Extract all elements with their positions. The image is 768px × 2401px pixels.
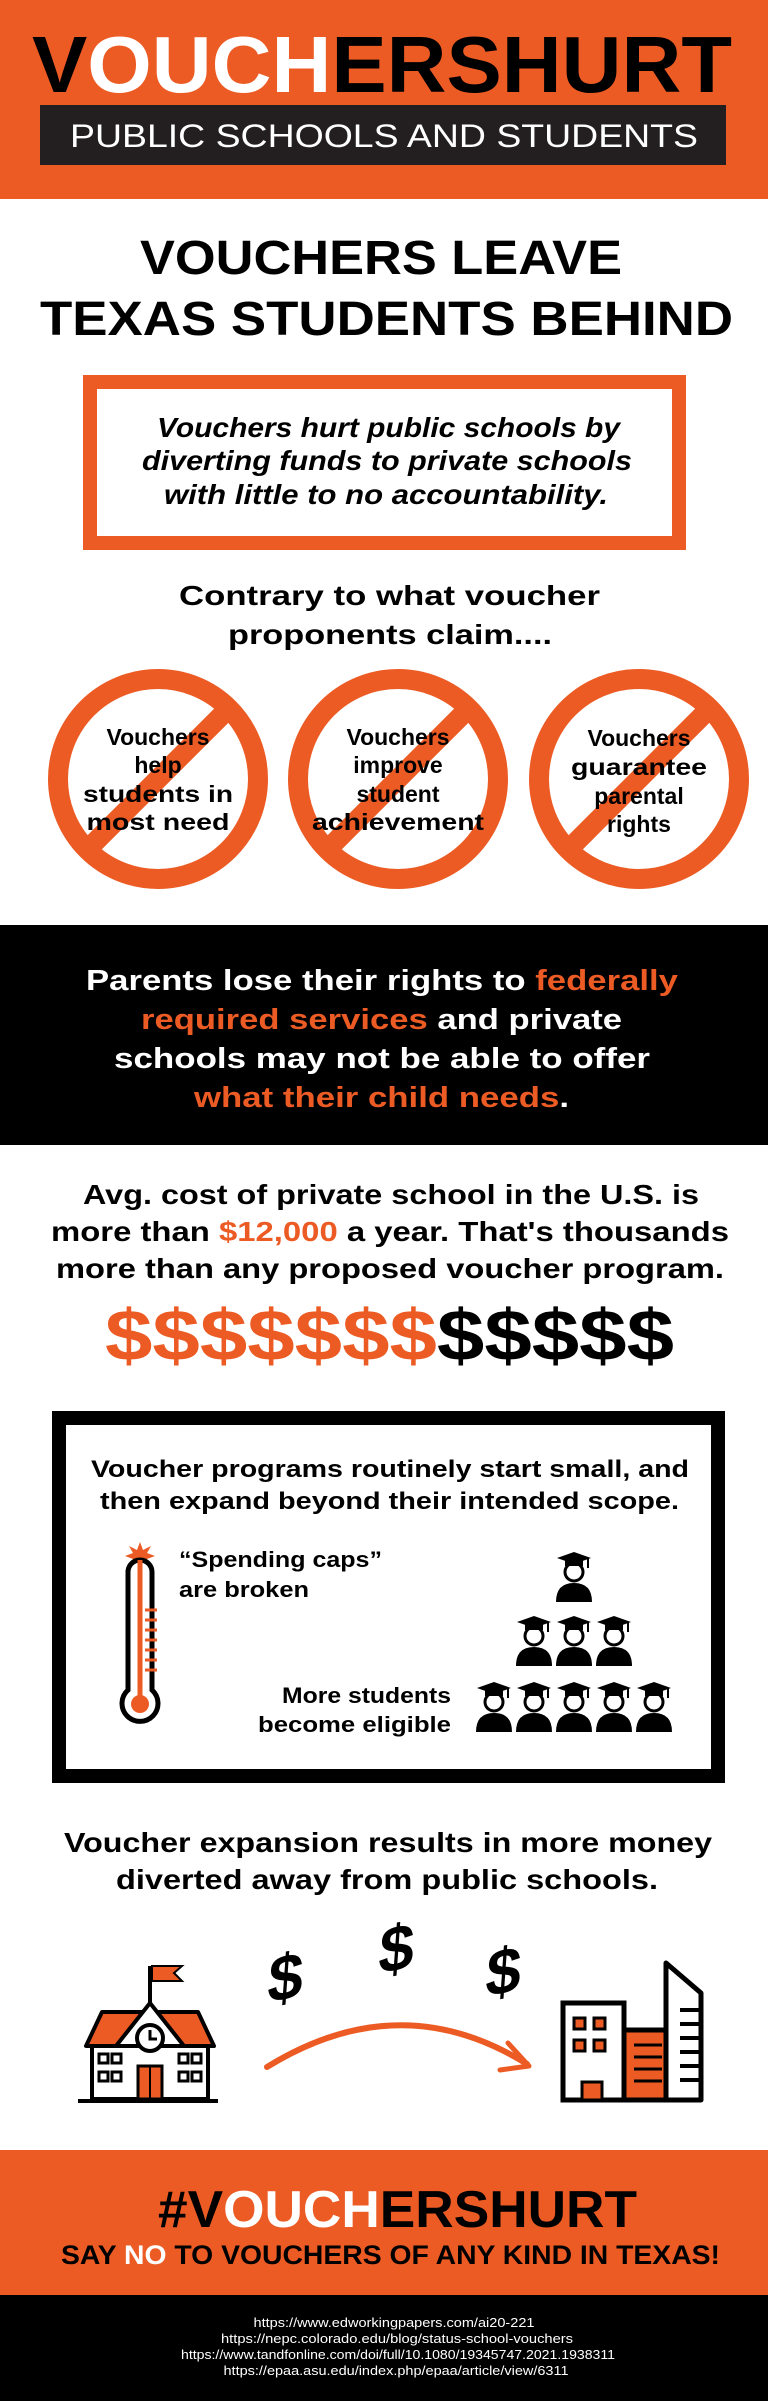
text: more students eligible: More students [282,1683,451,1708]
text: expansion diverts money: Voucher expansion results in more money [64,1827,712,1858]
icon: student pyramid [476,1552,672,1732]
icon: no-sign parental rights: Vouchers [587,725,691,751]
icon: no-sign improve achievement: student [356,781,440,807]
heading: contrary to claims [179,580,600,650]
footer: sources: https://www.tandfonline.com/doi/full/10.1080/19345747.2021.1938311 [181,2347,615,2362]
icon: no-sign improve achievement [298,679,498,879]
icon: public school [78,1966,218,2101]
icon: no-sign improve achievement: improve [353,752,443,778]
text: expansion diverts money [64,1827,712,1895]
icon: flying dollar signs: $ [265,1937,306,2017]
text: more students eligible [258,1683,451,1737]
panel heading: then expand beyond their intended scope. [100,1488,679,1515]
icon: thermometer [122,1542,158,1721]
title [40,232,733,346]
heading: contrary to claims: proponents claim.... [228,619,552,650]
footer: sources: https://www.edworkingpapers.com/ai20-221 [254,2315,534,2330]
icon: no-sign improve achievement: achievement [312,809,484,835]
icon: flying dollar signs: $ [483,1931,524,2011]
icon: no-sign parental rights: parental [594,783,684,809]
panel: parents lose rights: schools may not be able to offer [114,1043,650,1075]
footer banner: call to action [0,2150,768,2296]
callout: vouchers hurt public schools: Vouchers hurt public schools by [157,412,622,443]
dollar signs graphic: $$$$$$$ $$$$$ [105,1296,674,1376]
icon: no-sign improve achievement: Vouchers [346,724,450,750]
title: TEXAS STUDENTS BEHIND [40,293,733,346]
icon: no-sign helps students in most need: most need [86,809,230,835]
footer banner: call to action: SAY NO TO VOUCHERS OF ANY KIND IN TEXAS! [61,2240,720,2270]
icon: private school buildings [563,1963,701,2100]
text: average cost of private school: more than any proposed voucher program. [56,1253,724,1284]
callout: vouchers hurt public schools [90,382,679,543]
subtitle bar [40,105,726,165]
arrow: money flow [267,2025,529,2070]
panel: parents lose rights: what their child needs . [193,1082,569,1114]
callout: vouchers hurt public schools: with little to no accountability. [164,479,608,510]
footer banner: call to action: #VOUCHERSHURT [158,2181,637,2239]
panel heading: Voucher programs routinely start small, and [91,1456,689,1483]
text: more students eligible: become eligible [258,1712,451,1737]
icon: flying dollar signs: $ [376,1908,417,1988]
text: spending caps broken: “Spending caps” [179,1547,382,1572]
text: expansion diverts money: diverted away from public schools. [116,1864,658,1895]
panel: parents lose rights [0,925,768,1145]
panel heading [91,1456,689,1515]
logo: VOUCHERSHURT: VOUCHERSHURT [32,20,732,109]
text: spending caps broken [179,1547,382,1602]
icon: no-sign helps students in most need [58,679,258,879]
panel: parents lose rights: Parents lose their rights to federally [86,965,678,997]
icon: no-sign parental rights: rights [607,811,671,837]
text: average cost of private school: more than $12,000 a year. That's thousands [51,1216,729,1247]
footer: sources [0,2295,768,2401]
icon: no-sign helps students in most need: Vouchers [106,724,210,750]
subtitle bar: PUBLIC SCHOOLS AND STUDENTS [70,118,698,154]
footer: sources: https://nepc.colorado.edu/blog/status-school-vouchers [221,2331,574,2346]
panel: parents lose rights: required services and private [141,1004,622,1036]
callout: vouchers hurt public schools: diverting funds to private schools [142,445,632,476]
icon: no-sign parental rights [539,679,739,879]
icon: flying dollar signs [265,1908,524,2017]
footer: sources: https://epaa.asu.edu/index.php/epaa/article/view/6311 [224,2363,568,2378]
icon: no-sign parental rights: guarantee [571,754,707,780]
text: average cost of private school: Avg. cost of private school in the U.S. is [83,1179,699,1210]
icon: no-sign helps students in most need: help [134,752,182,778]
header banner [0,0,768,199]
icon: no-sign helps students in most need: students in [83,781,233,807]
text: spending caps broken: are broken [179,1577,309,1602]
text: average cost of private school [51,1179,729,1284]
title: VOUCHERS LEAVE [140,232,622,285]
heading: contrary to claims: Contrary to what voucher [179,580,600,611]
panel: voucher programs expand [59,1418,718,1776]
